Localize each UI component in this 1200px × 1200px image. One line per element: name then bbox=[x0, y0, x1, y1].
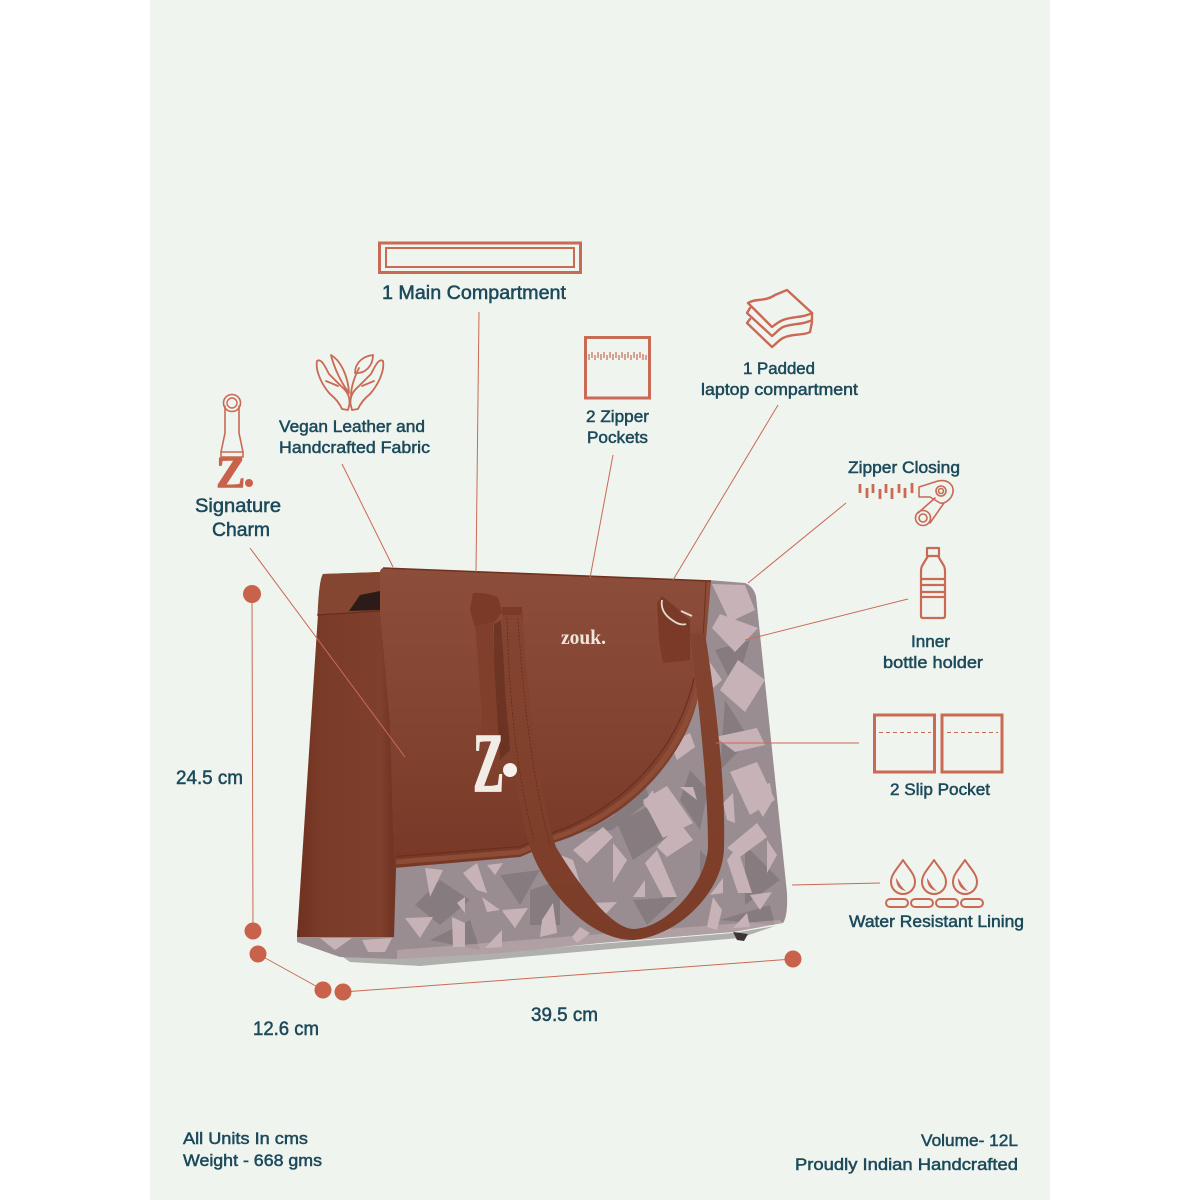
ground shadow bbox=[340, 926, 775, 966]
feature: padded laptop compartment: laptop compartment bbox=[701, 381, 858, 399]
curved seam bbox=[396, 682, 699, 862]
icon: zipper teeth bbox=[860, 483, 912, 499]
feature: zipper pockets: Pockets bbox=[587, 429, 648, 447]
feature: water resistant lining bbox=[849, 860, 1024, 931]
icon: zipper pull bbox=[916, 481, 953, 526]
feature: bottle holder: bottle holder bbox=[883, 654, 984, 672]
icon: charm: Z bbox=[216, 448, 245, 497]
feature: slip pockets: 2 Slip Pocket bbox=[890, 781, 990, 799]
feature: vegan leather: Vegan Leather and bbox=[279, 418, 425, 436]
side panel top flap bbox=[318, 572, 382, 615]
feature: main compartment: 1 Main Compartment bbox=[382, 283, 567, 304]
icon: zipper pocket bbox=[586, 338, 650, 398]
icon: bottle bbox=[921, 548, 945, 618]
feature: zipper closing: Zipper Closing bbox=[848, 459, 960, 477]
leader lines bbox=[250, 312, 908, 885]
footer note: volume and origin bbox=[795, 1132, 1018, 1174]
dimension: width 39.5 cm bbox=[334, 950, 802, 1026]
icon: two slip pockets bbox=[874, 715, 1002, 772]
icon: stacked layers bbox=[747, 290, 812, 347]
feature: zipper pockets bbox=[586, 338, 650, 447]
Z charm: Z bbox=[473, 717, 504, 810]
dimension: height 24.5 cm: 24.5 cm bbox=[176, 768, 243, 789]
handbag photo illustration bbox=[280, 568, 800, 970]
feature: bottle holder: Inner bbox=[911, 633, 951, 651]
footer note: volume and origin: Volume- 12L bbox=[921, 1132, 1018, 1150]
footer note: units and weight: Weight - 668 gms bbox=[183, 1152, 322, 1170]
feature: vegan leather bbox=[279, 355, 430, 457]
feature: padded laptop compartment bbox=[701, 290, 858, 399]
footer note: units and weight bbox=[183, 1130, 322, 1170]
icon: hands and leaf bbox=[317, 355, 383, 410]
front leather panel bbox=[380, 568, 711, 868]
left strap with loop bbox=[470, 593, 523, 760]
icon: charm bbox=[216, 394, 253, 497]
dimension: depth 12.6 cm: 12.6 cm bbox=[253, 1019, 319, 1040]
feature: padded laptop compartment: 1 Padded bbox=[743, 360, 815, 378]
side pocket opening bbox=[349, 591, 381, 611]
bag foot bbox=[733, 932, 748, 941]
feature: slip pockets bbox=[874, 715, 1002, 799]
feature: zipper pockets: 2 Zipper bbox=[586, 408, 650, 426]
brand logo: zouk. bbox=[561, 625, 606, 649]
feature: main compartment bbox=[380, 243, 580, 304]
footer note: volume and origin: Proudly Indian Handcrafted bbox=[795, 1156, 1018, 1174]
background panel bbox=[150, 0, 1050, 1200]
feature: vegan leather: Handcrafted Fabric bbox=[279, 439, 430, 457]
icon: main compartment bbox=[380, 243, 580, 272]
feature: signature charm: Signature bbox=[195, 496, 281, 517]
feature: bottle holder bbox=[883, 548, 984, 672]
patterned fabric body bbox=[297, 580, 788, 959]
icon: water drops bbox=[886, 860, 983, 907]
shoulder strap bbox=[502, 615, 724, 940]
dimension: depth 12.6 cm bbox=[250, 946, 332, 1040]
dimension: width 39.5 cm: 39.5 cm bbox=[531, 1005, 598, 1026]
feature: signature charm bbox=[195, 394, 281, 541]
feature: zipper closing bbox=[848, 459, 960, 526]
left side panel bbox=[297, 572, 396, 937]
feature: signature charm: Charm bbox=[212, 520, 270, 541]
dimension: height 24.5 cm bbox=[176, 585, 262, 940]
feature: water resistant lining: Water Resistant Lining bbox=[849, 913, 1024, 931]
right strap tab and ring bbox=[657, 596, 692, 663]
footer note: units and weight: All Units In cms bbox=[183, 1130, 308, 1148]
